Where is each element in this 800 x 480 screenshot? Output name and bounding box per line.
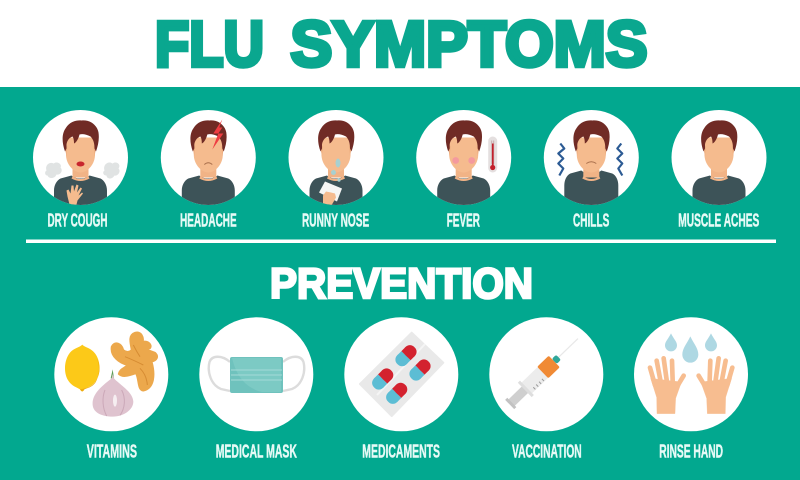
- label: headache: HEADACHE: [180, 211, 237, 231]
- label: runny nose: RUNNY NOSE: [302, 211, 369, 231]
- panel: symptoms: [33, 110, 766, 231]
- label: chills: CHILLS: [573, 211, 609, 231]
- title: FLU: [155, 8, 264, 80]
- symptom: muscle aches icon: [672, 110, 766, 208]
- symptom: headache icon: [161, 110, 256, 208]
- label: medicaments: MEDICAMENTS: [362, 441, 440, 461]
- symptom: fever icon: [416, 110, 511, 208]
- heading: prevention: PREVENTION: [270, 260, 533, 308]
- icon: ginger: [111, 332, 157, 391]
- icon: left hand: [650, 358, 684, 414]
- label: vitamins: VITAMINS: [87, 441, 137, 461]
- symptom: runny nose icon: [288, 110, 384, 208]
- panel: prevention: [54, 317, 748, 461]
- label: rinse hand: RINSE HAND: [659, 441, 723, 461]
- prevention: medicaments icon: [344, 317, 458, 431]
- label: dry cough: DRY COUGH: [48, 211, 108, 231]
- prevention: rinse hand icon: [634, 317, 748, 431]
- icon: lemon: [65, 345, 100, 391]
- label: fever: FEVER: [447, 211, 480, 231]
- prevention: vitamins icon: [54, 317, 168, 431]
- icon: garlic: [93, 369, 133, 417]
- symptom: chills icon: [544, 110, 639, 208]
- divider line: [26, 240, 776, 243]
- symptom: dry cough icon: [33, 110, 128, 208]
- title: SYMPTOMS: [290, 8, 648, 80]
- prevention: medical mask icon: [199, 317, 313, 431]
- label: vaccination: VACCINATION: [512, 441, 582, 461]
- label: medical mask: MEDICAL MASK: [216, 441, 297, 461]
- prevention: vaccination icon: [489, 317, 603, 431]
- icon: water drops: [665, 333, 717, 363]
- icon: thermometer: [488, 136, 497, 172]
- icon: right hand: [699, 358, 732, 414]
